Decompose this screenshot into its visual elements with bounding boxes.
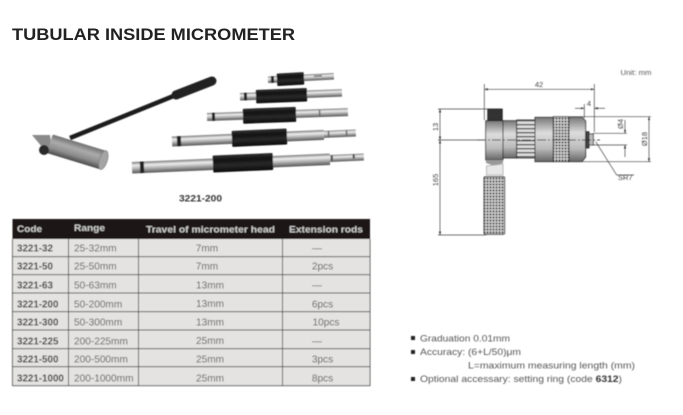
- photo caption: 3221-200: [179, 194, 222, 204]
- extension rod 2: [240, 87, 342, 104]
- range column: 50-200mm: [74, 300, 122, 310]
- travel column: 7mm: [196, 262, 218, 272]
- travel column: 25mm: [196, 374, 224, 384]
- extension rods column: [312, 244, 339, 384]
- note: accuracy: [411, 347, 635, 372]
- range column: [74, 244, 133, 384]
- range column: 200-225mm: [74, 336, 128, 348]
- unit label: Unit: mm: [620, 70, 652, 77]
- extension rod 5: [132, 149, 364, 176]
- dimension labels: 13: [431, 123, 440, 131]
- extension rod 3: [207, 105, 348, 125]
- micrometer head: [32, 134, 110, 171]
- extension rod 4: [172, 125, 356, 149]
- specification notes: [411, 334, 635, 385]
- code column: 3221-50: [17, 262, 54, 272]
- range column: 25-50mm: [74, 262, 117, 272]
- range column: 25-32mm: [74, 244, 117, 254]
- extension rods column: 2pcs: [312, 262, 333, 272]
- code column: 3221-225: [17, 336, 59, 348]
- dimension labels: 42: [535, 80, 543, 89]
- dimension lines: [438, 84, 651, 235]
- dimension labels: [431, 80, 649, 186]
- extension rods column: 3pcs: [312, 354, 333, 366]
- extension rods column: 6pcs: [312, 300, 333, 310]
- drawing: centre line: [477, 139, 600, 141]
- extension rods column: —: [312, 280, 323, 292]
- code column: 3221-200: [17, 300, 59, 310]
- travel column: 13mm: [196, 318, 224, 328]
- note: optional accessary: Optional accessary: setting ring (code 6312): [420, 374, 622, 385]
- travel column: 7mm: [196, 244, 218, 254]
- dimension labels: Ø4: [616, 119, 625, 129]
- range column: 50-63mm: [74, 280, 117, 292]
- range column: 200-1000mm: [74, 374, 133, 384]
- table header: [12, 219, 370, 239]
- table body background: [12, 239, 370, 386]
- travel column: 25mm: [196, 336, 224, 347]
- product photo: micrometer head and extension rods: [32, 71, 364, 176]
- dimension labels: Ø18: [640, 132, 649, 146]
- note: accuracy: Accuracy: (6+L/50)μm: [420, 347, 521, 358]
- technical drawing: [431, 80, 651, 235]
- code column: 3221-1000: [17, 374, 64, 384]
- note: graduation: Graduation 0.01mm: [420, 334, 510, 344]
- code column: 3221-32: [17, 244, 54, 254]
- extension rods column: 10pcs: [313, 318, 339, 328]
- table header: Range: [74, 223, 105, 233]
- dimension labels: SR7: [618, 173, 633, 182]
- travel column: 25mm: [196, 354, 224, 366]
- table header: Code: [17, 224, 42, 234]
- dimension labels: 165: [431, 174, 440, 186]
- title: TUBULAR INSIDE MICROMETER: [12, 26, 295, 44]
- extension rods column: 8pcs: [312, 374, 333, 384]
- travel column: 13mm: [196, 280, 224, 292]
- specification table: [12, 219, 370, 386]
- note: accuracy: L=maximum measuring length (mm): [468, 360, 635, 372]
- drawing: handle and knob: [484, 109, 505, 234]
- drawing: micrometer body: [503, 117, 593, 162]
- extension rods column: —: [312, 244, 323, 254]
- travel column: [196, 244, 224, 384]
- dimension labels: 4: [587, 99, 591, 108]
- range column: 200-500mm: [74, 354, 128, 366]
- table header: Travel of micrometer head: [146, 224, 275, 234]
- code column: [17, 244, 64, 384]
- range column: 50-300mm: [74, 318, 122, 328]
- code column: 3221-500: [17, 354, 59, 366]
- code column: 3221-63: [17, 280, 54, 292]
- code column: 3221-300: [17, 318, 59, 328]
- table header: Extension rods: [289, 224, 363, 234]
- micrometer handle: [70, 81, 212, 138]
- travel column: 13mm: [196, 299, 224, 310]
- extension rods column: —: [312, 336, 323, 348]
- extension rod 1: [268, 71, 334, 86]
